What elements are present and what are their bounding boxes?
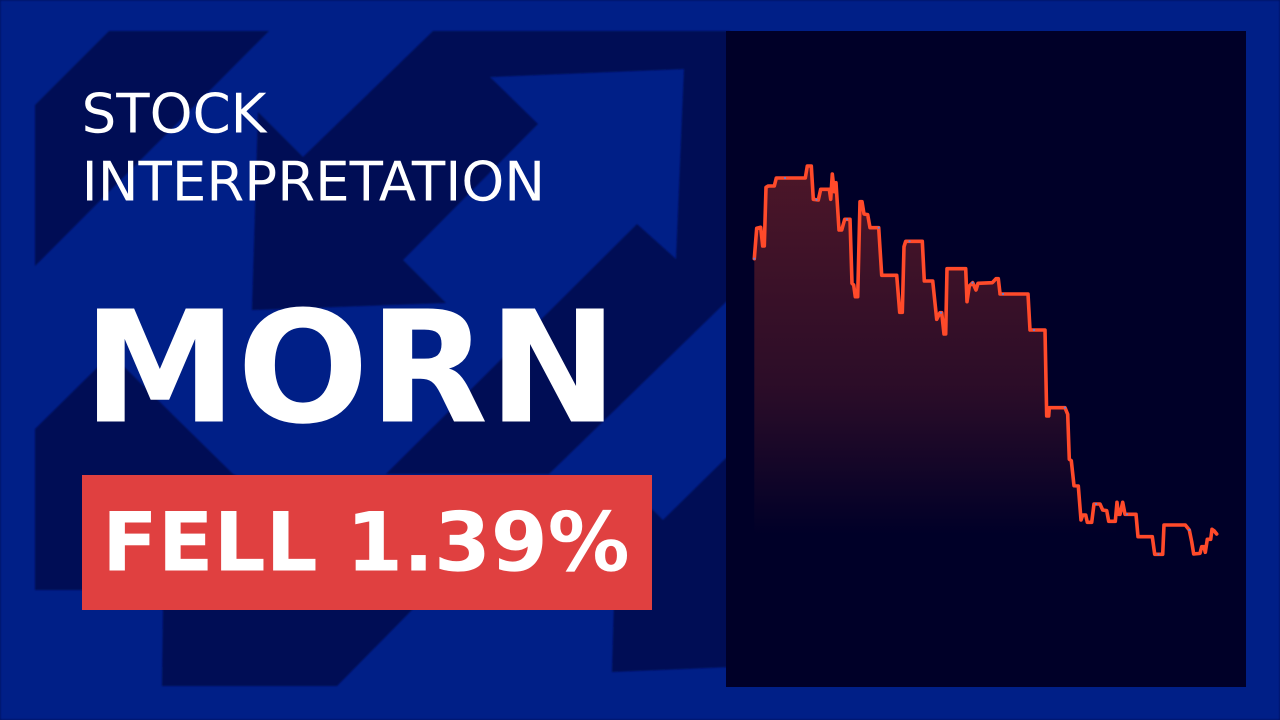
title	[82, 82, 545, 214]
title: INTERPRETATION	[82, 150, 545, 214]
chart price line	[754, 166, 1217, 554]
chart area fill	[754, 166, 1117, 535]
title: STOCK	[82, 82, 268, 146]
chart data markers	[753, 177, 1190, 555]
background arrow pattern	[35, 31, 730, 686]
callout: price change: FELL 1.39%	[102, 496, 630, 591]
panel: price chart	[726, 31, 1246, 687]
callout: price change	[82, 475, 652, 610]
ticker symbol: MORN	[83, 278, 618, 458]
